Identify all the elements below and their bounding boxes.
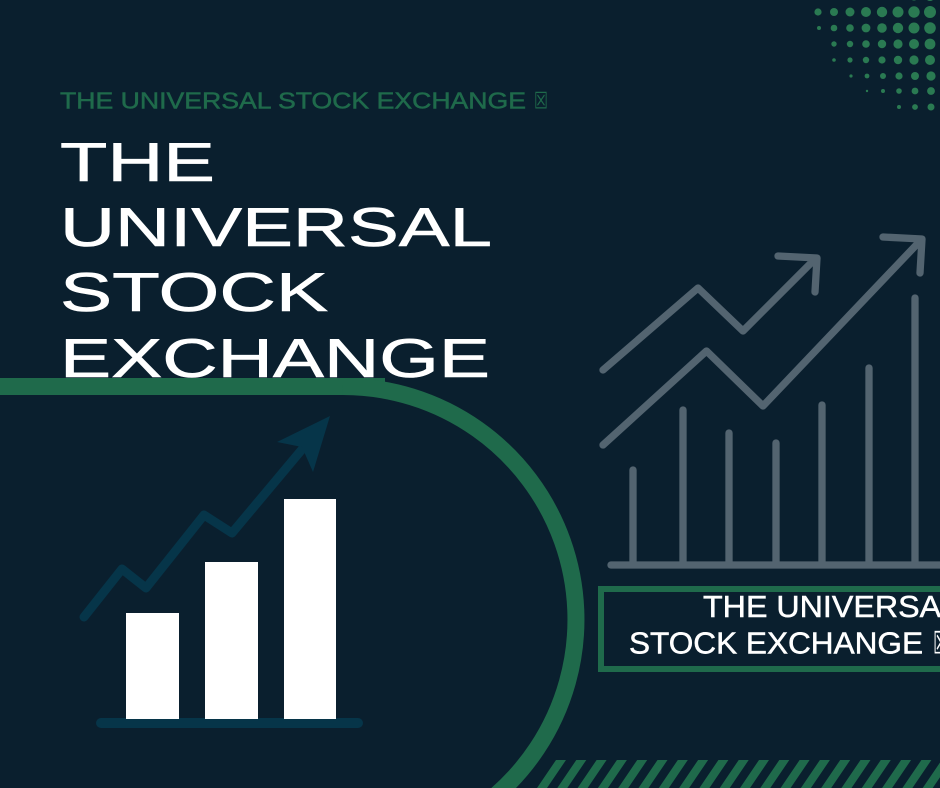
subtitle: THE UNIVERSAL STOCK EXCHANGE: [60, 88, 526, 114]
chart bars: [633, 298, 915, 564]
title: UNIVERSAL: [60, 196, 492, 258]
striped decoration: [537, 760, 940, 788]
arrow line: [84, 447, 304, 617]
chart baseline: [611, 561, 940, 569]
title: STOCK: [60, 261, 328, 323]
bars: [126, 613, 179, 719]
caption box: [601, 589, 940, 669]
halftone dot pattern: [814, 0, 936, 110]
caption text: STOCK EXCHANGE: [629, 626, 923, 660]
caption text: [629, 589, 940, 660]
title: THE: [60, 131, 215, 193]
lower trend arrow: [603, 237, 922, 445]
title: [60, 131, 492, 389]
subtitle: ☒: [534, 88, 548, 114]
baseline: [96, 718, 363, 728]
icon: bar chart with rising arrow: [84, 416, 363, 728]
title: EXCHANGE: [60, 327, 490, 389]
arrow head: [277, 416, 330, 472]
upper trend arrow: [603, 256, 817, 370]
line chart illustration: [603, 237, 940, 565]
green rounded outline: [0, 378, 576, 788]
